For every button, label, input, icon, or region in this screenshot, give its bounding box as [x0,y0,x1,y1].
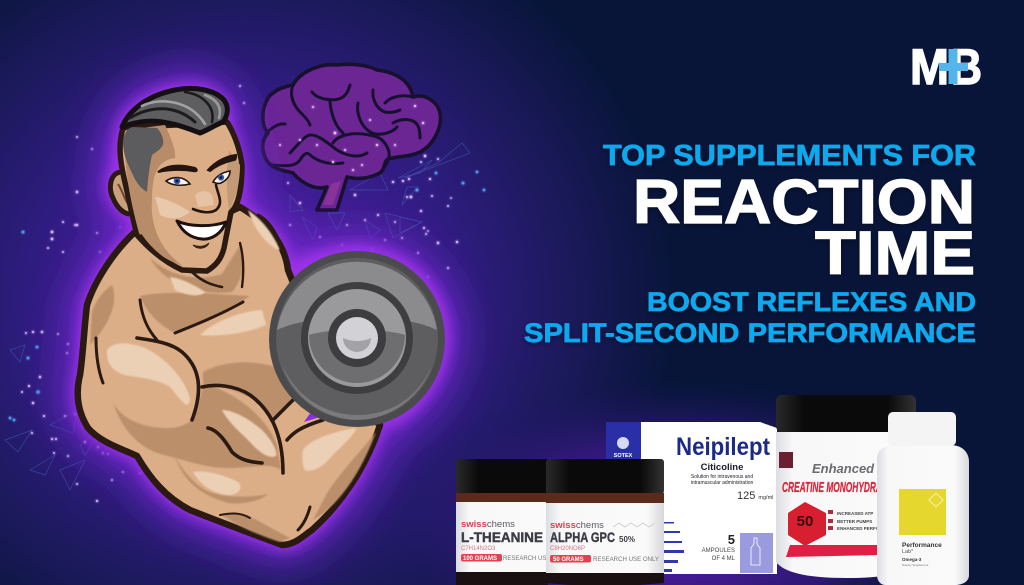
product: Neipilept box: 5 [728,532,735,547]
product: Neipilept box: OF 4 ML [712,556,736,562]
product: Neipilept box: Citicoline [701,462,743,473]
heading line: time: TIME [815,219,975,287]
muscle highlights [107,210,357,495]
product: Alpha GPC jar: RESEARCH USE ONLY [593,557,659,563]
product: Performance Lab bottle: Omega-3 [902,557,922,562]
eyebrows [158,166,197,172]
star field [9,85,485,502]
product: Neipilept box: 125 mg/ml [737,490,773,502]
mouth [177,221,226,239]
product: creatine tub: BETTER PUMPS [837,519,872,524]
product: L-Theanine jar [456,459,548,585]
product: Neipilept box: Neipilept [676,433,771,461]
logo: MHB [910,39,982,95]
product: Alpha GPC jar: C8H20NO6P [550,546,585,552]
nose [193,185,220,212]
product: L-Theanine jar: 100 GRAMS [463,556,497,562]
product: Alpha GPC jar: 50 GRAMS [553,557,584,563]
icon: brain [263,64,440,210]
product: creatine tub: CREATINE MONOHYDRATE [782,480,893,496]
product: Neipilept box: intramuscular administration [691,480,753,486]
product: Alpha GPC jar [546,459,664,585]
product: Performance Lab bottle: Performance [902,542,942,549]
product: Alpha GPC jar: ALPHA GPC [550,530,615,545]
hair [122,88,227,133]
product: creatine tub [776,395,916,578]
heading line: reaction: REACTION [633,168,975,237]
character: muscular man with dumbbell [78,88,445,545]
logo: MHB: M [910,39,949,95]
icon: sotex globe [617,437,629,449]
product: Neipilept box [606,422,777,574]
eyes [166,178,190,185]
product: creatine tub: 50 [797,513,813,530]
ear [110,172,140,214]
muscle lines [96,215,323,530]
head [110,88,242,272]
body [78,207,380,545]
character tight glow [78,88,445,545]
heading [524,140,976,348]
heading line: top supplements for: TOP SUPPLEMENTS FOR [603,140,976,172]
muscle shading [90,245,376,542]
product: Alpha GPC jar: 50% [619,535,635,544]
character wide glow [78,88,445,545]
constellation triangles [5,143,470,490]
product: Neipilept box: AMPOULES [702,548,735,554]
product: L-Theanine jar: RESEARCH USE ONLY [503,556,568,562]
product: L-Theanine jar: swisschems [461,519,515,530]
product: creatine tub: Enhanced [812,461,875,476]
face shade [125,125,183,266]
stars over brain [279,105,424,171]
subheading line 2: SPLIT-SECOND PERFORMANCE [524,318,976,348]
product: Performance Lab bottle: Lab° [902,549,913,555]
product: L-Theanine jar: L-THEANINE [461,530,543,545]
product: Performance Lab bottle: Dietary Supplement [902,563,929,567]
product: Alpha GPC jar: swisschems [550,520,604,531]
product: Neipilept box: Solution for intravenous and [691,474,753,480]
face [120,122,242,271]
logo: MHB: B [951,39,982,95]
product: Performance Lab bottle [877,412,969,585]
arm gap [304,412,320,422]
product: creatine tub: ENHANCED PERFORMANCE [837,526,899,531]
shaved side [123,127,163,192]
product: creatine tub: INCREASED ATP [837,511,873,516]
jaw beard line [140,235,207,272]
dumbbell plate [269,251,445,427]
subheading line 1: BOOST REFLEXES AND [647,287,976,317]
product: L-Theanine jar: C7H14N2O3 [461,546,496,552]
product: Neipilept box: SOTEX [614,453,633,459]
icon: label emblem [929,493,943,507]
